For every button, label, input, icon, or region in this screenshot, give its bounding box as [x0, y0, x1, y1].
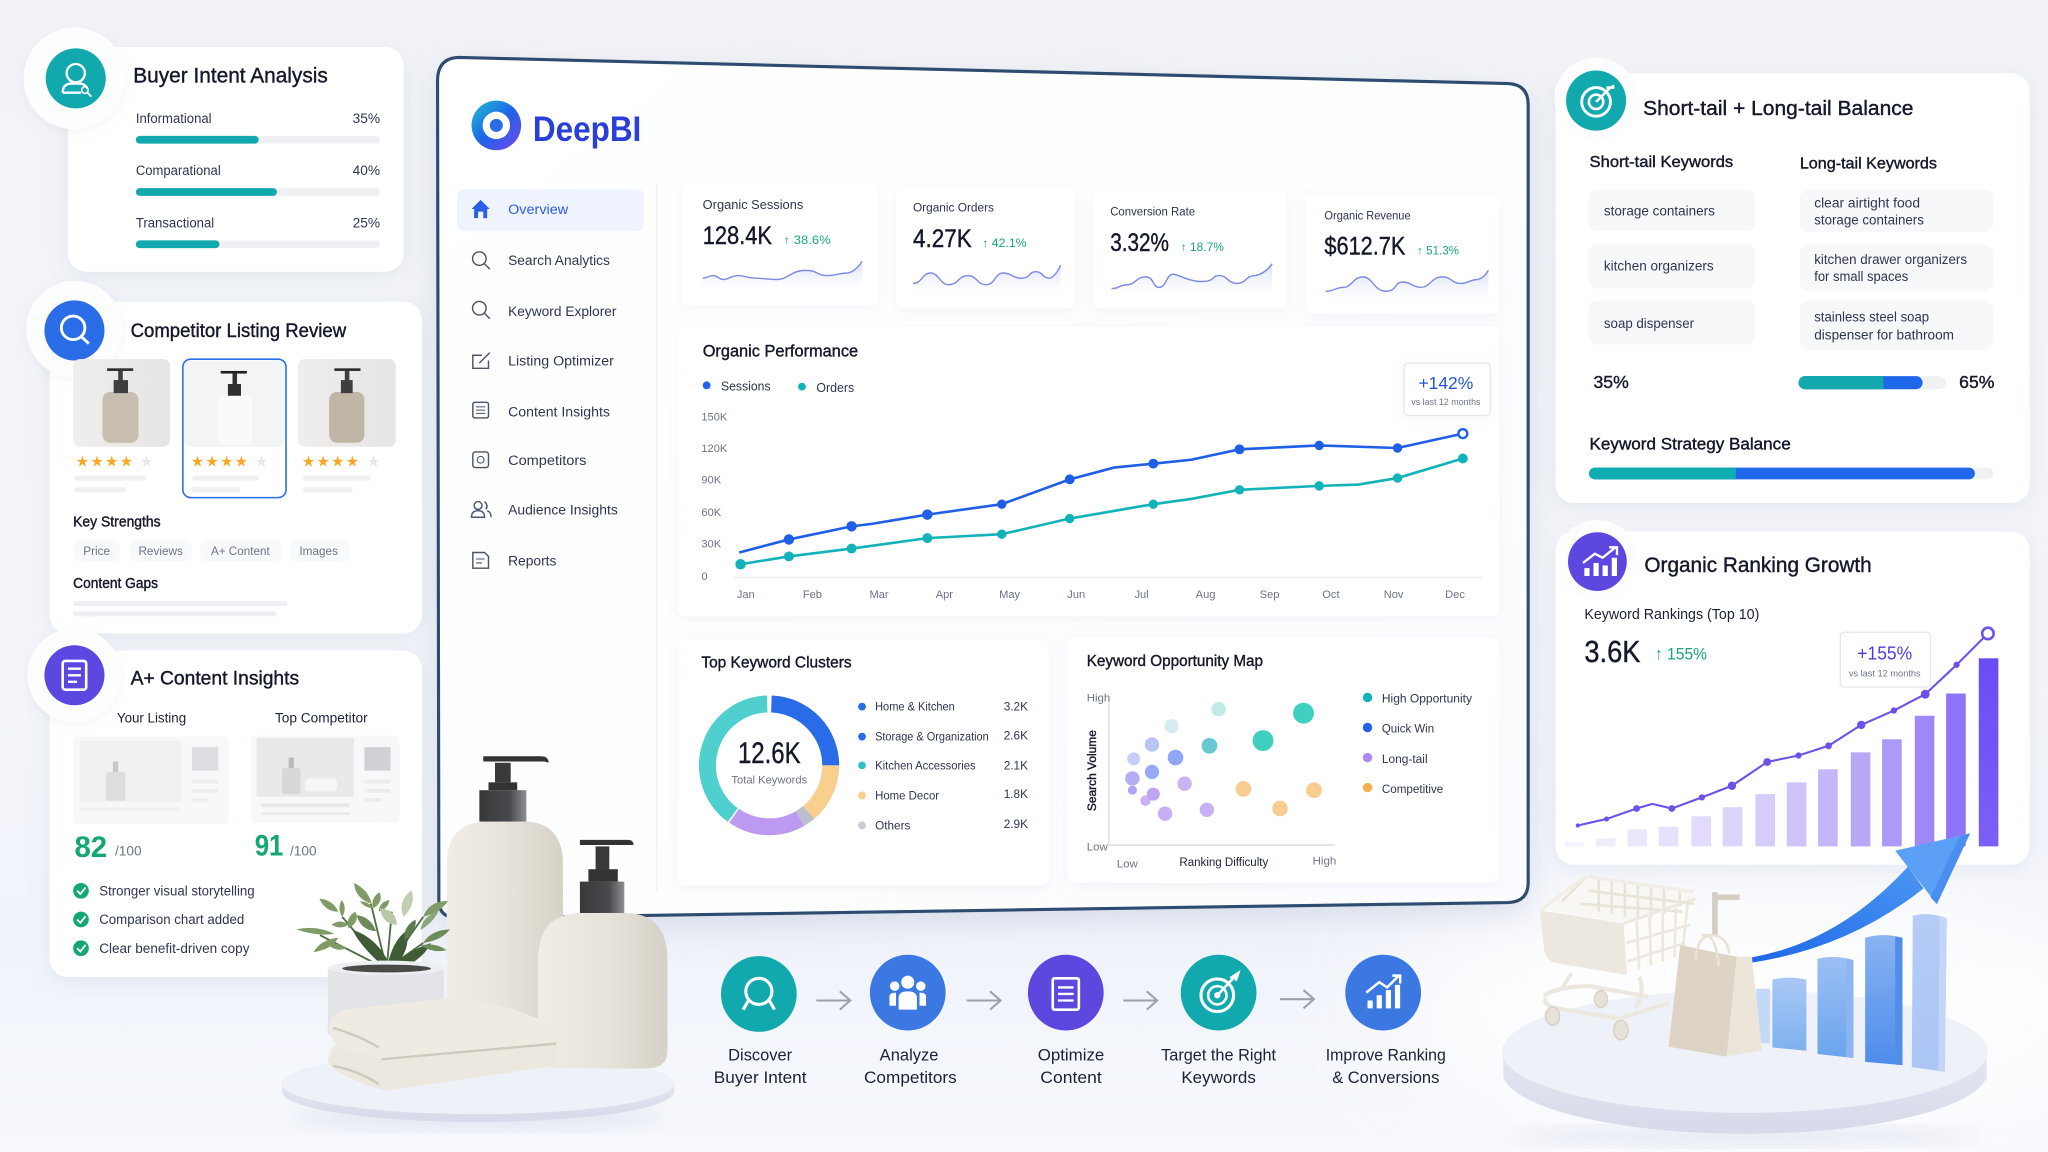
step 5: improve ranking: & Conversions — [1332, 1068, 1439, 1087]
callout: +155%: +155% — [1857, 643, 1912, 664]
icon: document — [44, 645, 104, 705]
checklist — [73, 883, 255, 956]
donut legend — [858, 701, 1028, 832]
shopping cart — [1540, 876, 1740, 1040]
sidebar navigation: Competitors — [508, 453, 587, 468]
step 4: target keywords: Target the Right — [1161, 1046, 1276, 1065]
donut panel: top keyword clusters: Top Keyword Clusters — [701, 654, 852, 671]
KPI card: conversion rate: 3.32% — [1110, 230, 1169, 257]
callout: +155%: vs last 12 months — [1849, 668, 1921, 679]
arrow — [1280, 990, 1314, 1008]
intent bars — [136, 111, 380, 248]
KPI card: organic orders: Organic Orders — [913, 201, 994, 215]
illustration: cart, bag and 3D growth bars on platform — [1502, 833, 1988, 1147]
long-tail keyword pills — [1800, 189, 1993, 350]
short/long split bar — [1799, 376, 1946, 389]
KPI card: organic sessions: Organic Sessions — [703, 197, 803, 212]
chart axis labels: Jan — [737, 589, 755, 601]
donut panel: top keyword clusters: 12.6K — [738, 737, 801, 770]
intent bars: Transactional — [136, 215, 214, 230]
step 3: optimize content: Optimize — [1038, 1046, 1104, 1065]
chart axis labels: 0 — [701, 571, 708, 583]
product 3: ★★★★ — [302, 453, 360, 470]
illustration: bottles, plant and towels on platform — [282, 756, 674, 1131]
donut panel: top keyword clusters — [678, 640, 1049, 886]
checklist: Stronger visual storytelling — [99, 883, 255, 898]
donut panel: top keyword clusters: Total Keywords — [731, 775, 807, 787]
strength pills: A+ Content — [211, 545, 270, 558]
arrow — [1123, 991, 1157, 1010]
panel: short-tail and long-tail balance — [1554, 57, 2030, 503]
panel: organic ranking growth — [1556, 520, 2030, 865]
long-tail keyword pills: storage containers — [1814, 213, 1924, 228]
short-tail keyword pills: storage containers — [1604, 204, 1715, 219]
panel: short-tail and long-tail balance: Short-tail + Long-tail Balance — [1643, 98, 1913, 120]
line chart panel: organic performance: Orders — [816, 380, 854, 395]
step 4: target keywords: Keywords — [1181, 1068, 1256, 1087]
shopping bag — [1669, 935, 1762, 1057]
step 4: target keywords — [1161, 955, 1276, 1087]
donut legend: Others — [875, 819, 910, 832]
KPI card: organic sessions — [682, 183, 878, 306]
chart axis labels: Oct — [1322, 589, 1340, 601]
step 5: improve ranking: Improve Ranking — [1326, 1046, 1446, 1065]
donut legend: Home & Kitchen — [875, 701, 955, 714]
chart axis labels: Sep — [1260, 589, 1279, 601]
bubble chart axes: Search Volume — [1086, 730, 1099, 811]
sidebar navigation: Reports — [508, 554, 557, 569]
KPI card: organic orders: 4.27K — [913, 226, 972, 253]
panel: A+ content insights: Top Competitor — [275, 710, 368, 725]
bubble chart panel: keyword opportunity map — [1067, 637, 1499, 883]
orders line — [735, 453, 1468, 569]
panel: organic ranking growth: 3.6K — [1584, 634, 1641, 669]
bubble legend: Competitive — [1382, 782, 1444, 796]
product 1: ★ — [140, 453, 153, 470]
sidebar navigation: Content Insights — [508, 405, 610, 420]
chart axis labels: 30K — [701, 538, 722, 550]
short-tail keyword pills: kitchen organizers — [1604, 258, 1714, 273]
cart frame — [1544, 973, 1669, 1019]
bubble chart axes: Low — [1117, 858, 1139, 870]
basket right wall wires — [1624, 899, 1695, 969]
step 2: analyze competitors: Analyze — [880, 1046, 938, 1065]
bubble legend: High Opportunity — [1382, 692, 1472, 706]
panel: organic ranking growth: Keyword Rankings (Top 10) — [1584, 607, 1759, 623]
chart axis labels: Aug — [1196, 589, 1215, 601]
3D bars — [1756, 914, 1947, 1072]
plant — [296, 883, 450, 970]
bubble chart axes: High — [1313, 856, 1336, 868]
chart axis labels: Feb — [803, 589, 822, 601]
arrow — [816, 991, 850, 1010]
long-tail keyword pills: clear airtight food — [1814, 196, 1920, 211]
panel: dashboard monitor — [438, 57, 1528, 918]
bubble chart axes: Low — [1087, 841, 1108, 853]
panel: A+ content insights: /100 — [115, 844, 142, 859]
panel: A+ content insights — [27, 628, 422, 977]
donut legend: 2.1K — [1004, 759, 1028, 772]
long-tail keyword pills: dispenser for bathroom — [1814, 328, 1954, 343]
product 3: ★ — [367, 453, 380, 470]
chart axis labels: Apr — [936, 589, 953, 601]
line chart panel: organic performance: Sessions — [721, 379, 771, 394]
strategy balance bar — [1589, 468, 1993, 479]
long-tail keyword pills: kitchen drawer organizers — [1814, 252, 1967, 267]
KPI card: organic revenue: $612.7K — [1324, 234, 1406, 261]
KPI card: conversion rate: Conversion Rate — [1110, 205, 1195, 219]
line chart panel: organic performance: Organic Performance — [703, 343, 858, 361]
product 2 highlighted: ★★★★ — [191, 453, 249, 470]
KPI card: organic revenue — [1306, 195, 1499, 313]
icon: growth chart — [1568, 532, 1627, 591]
intent bars: Informational — [136, 111, 212, 126]
small pump bottle — [538, 840, 667, 1068]
line chart panel: organic performance — [678, 327, 1499, 616]
thumbnail: your listing — [73, 737, 229, 824]
cart handle — [1715, 892, 1740, 935]
bubble chart axes — [1086, 692, 1336, 870]
step 3: optimize content — [1028, 955, 1104, 1087]
step 1: discover buyer intent: Buyer Intent — [714, 1068, 807, 1087]
panel: buyer intent analysis: Buyer Intent Analysis — [133, 64, 328, 87]
chart axis labels — [701, 412, 1465, 601]
donut legend: 3.2K — [1004, 701, 1028, 714]
logo — [472, 101, 641, 150]
panel: short-tail and long-tail balance: Keyword Strategy Balance — [1590, 435, 1791, 453]
line: ranking trend — [1576, 628, 1994, 828]
donut legend: 1.8K — [1004, 788, 1028, 801]
panel: competitor listing review: Content Gaps — [73, 576, 158, 592]
panel: short-tail and long-tail balance: 65% — [1959, 372, 1995, 392]
blue growth arrow — [1752, 833, 1970, 963]
strength pills: Reviews — [138, 545, 183, 558]
panel: competitor listing review: Key Strengths — [73, 514, 161, 530]
intent bars: 35% — [353, 111, 380, 126]
panel: short-tail and long-tail balance: Short-tail Keywords — [1590, 154, 1733, 171]
donut legend: 2.9K — [1004, 818, 1028, 831]
product 1 — [73, 359, 170, 492]
KPI card: organic sessions: 128.4K — [703, 223, 772, 250]
panel: A+ content insights: A+ Content Insights — [131, 668, 299, 689]
short-tail keyword pills — [1588, 189, 1755, 345]
sessions line — [739, 429, 1467, 552]
product 1: ★★★★ — [76, 453, 134, 470]
donut legend: 2.6K — [1004, 729, 1028, 742]
panel: organic ranking growth: ↑ 155% — [1655, 645, 1707, 664]
step 3: optimize content: Content — [1040, 1068, 1102, 1087]
KPI card: conversion rate — [1093, 191, 1287, 308]
callout: +142%: vs last 12 months — [1411, 397, 1481, 407]
sidebar navigation — [457, 183, 657, 891]
bubble chart axes: Ranking Difficulty — [1179, 856, 1268, 869]
icon: buyer search — [46, 48, 106, 108]
bubble legend: Long-tail — [1382, 752, 1428, 766]
step 1: discover buyer intent — [714, 956, 807, 1087]
intent bars: Comparational — [136, 163, 221, 178]
panel: short-tail and long-tail balance: 35% — [1593, 372, 1629, 392]
donut legend: Home Decor — [875, 789, 939, 802]
panel: buyer intent analysis — [24, 27, 404, 272]
intent bars: 40% — [353, 163, 380, 178]
product 2 highlighted: ★ — [255, 453, 268, 470]
arrow — [967, 991, 1000, 1010]
bubble chart panel: keyword opportunity map: Keyword Opportunity Map — [1087, 653, 1263, 670]
chart axis labels: May — [999, 589, 1021, 601]
KPI card: organic revenue: Organic Revenue — [1324, 208, 1411, 222]
checklist: Comparison chart added — [99, 912, 244, 927]
platform — [1503, 993, 1987, 1134]
chart axis labels: 90K — [701, 474, 722, 486]
callout: +142% — [1404, 363, 1490, 415]
chart axis labels: Nov — [1384, 589, 1404, 601]
bar chart: ranking growth — [1565, 658, 1998, 846]
checklist: Clear benefit-driven copy — [99, 941, 250, 956]
panel: competitor listing review — [26, 281, 422, 633]
logo: DeepBI — [533, 110, 641, 149]
intent bars: 25% — [353, 215, 380, 230]
basket front panel — [1540, 910, 1627, 975]
bubble chart axes: High — [1087, 692, 1110, 704]
chart axis labels: Jun — [1067, 589, 1085, 601]
KPI card: organic orders — [896, 188, 1075, 308]
strength pills — [73, 539, 350, 562]
panel: short-tail and long-tail balance: Long-tail Keywords — [1800, 155, 1937, 172]
strength pills: Price — [83, 545, 110, 558]
sidebar navigation: Audience Insights — [508, 503, 618, 518]
thumbnail: top competitor — [251, 735, 400, 823]
donut chart — [707, 704, 831, 827]
bubble legend: Quick Win — [1382, 722, 1434, 736]
panel: competitor listing review: Competitor Listing Review — [131, 321, 346, 342]
callout: +142%: +142% — [1418, 373, 1474, 393]
chart axis labels: Jul — [1134, 589, 1149, 601]
bubble legend — [1363, 692, 1472, 796]
KPI card: organic orders: ↑ 42.1% — [982, 237, 1027, 250]
KPI card: organic sessions: ↑ 38.6% — [784, 234, 831, 247]
chart axis labels: 150K — [701, 412, 728, 424]
callout: +155% — [1840, 632, 1930, 687]
product 3 — [298, 359, 396, 492]
basket interior grid — [1540, 876, 1695, 975]
sidebar navigation: Listing Optimizer — [508, 354, 614, 369]
big pump bottle — [447, 756, 563, 1032]
chart axis labels: Mar — [869, 589, 889, 601]
pot — [328, 961, 445, 1034]
bubbles — [1125, 702, 1322, 821]
long-tail keyword pills: for small spaces — [1814, 269, 1908, 284]
KPI card: organic revenue: ↑ 51.3% — [1417, 245, 1459, 258]
panel: A+ content insights: 91 — [255, 830, 283, 863]
chart axis labels: Dec — [1445, 589, 1465, 601]
chart axis labels: 60K — [701, 507, 722, 519]
short-tail keyword pills: soap dispenser — [1604, 316, 1694, 331]
icon: target — [1566, 71, 1626, 131]
donut legend: Kitchen Accessories — [875, 759, 976, 772]
step 2: analyze competitors: Competitors — [864, 1068, 957, 1087]
panel: A+ content insights: 82 — [74, 831, 107, 864]
KPI card: conversion rate: ↑ 18.7% — [1181, 241, 1224, 254]
donut legend: Storage & Organization — [875, 731, 989, 744]
chart axis labels: 120K — [701, 443, 728, 455]
step 2: analyze competitors — [864, 955, 957, 1087]
long-tail keyword pills: stainless steel soap — [1814, 309, 1930, 324]
panel: A+ content insights: /100 — [290, 844, 317, 859]
cart wheels — [1545, 991, 1628, 1040]
sidebar navigation: Overview — [508, 202, 568, 217]
panel: organic ranking growth: Organic Ranking Growth — [1644, 554, 1872, 577]
towels — [328, 998, 557, 1091]
step 5: improve ranking — [1326, 955, 1446, 1087]
strength pills: Images — [299, 545, 338, 558]
workflow steps — [714, 955, 1446, 1087]
icon: magnifier — [44, 300, 104, 360]
sidebar navigation: Keyword Explorer — [508, 304, 617, 319]
sidebar navigation: Search Analytics — [508, 253, 610, 268]
product 2 highlighted — [183, 359, 286, 498]
panel: A+ content insights: Your Listing — [117, 710, 186, 725]
step 1: discover buyer intent: Discover — [728, 1046, 792, 1065]
